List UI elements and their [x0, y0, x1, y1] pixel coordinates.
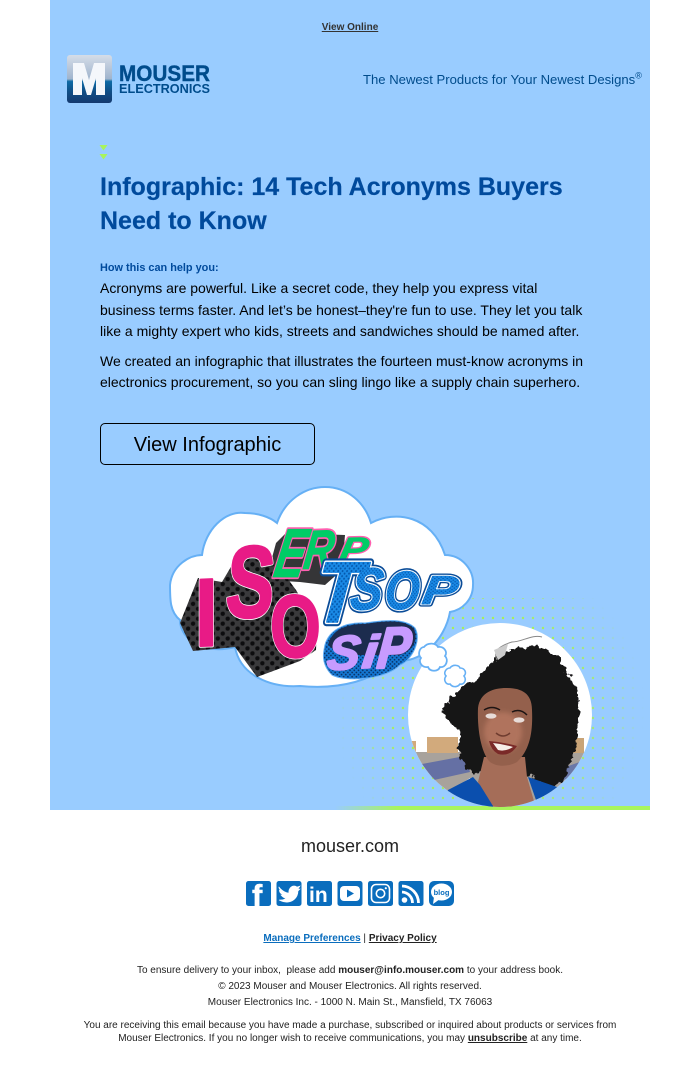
- word: ERP: P: [337, 531, 372, 569]
- small thought puff 1: [419, 644, 447, 671]
- body text: [100, 280, 582, 339]
- link: mouser.com: mouser.com: [301, 836, 399, 856]
- icon: linkedin: in: [309, 884, 328, 907]
- footer legal text: Mouser Electronics. If you no longer wish to receive communications, you may unsubscribe at any time.: [118, 1032, 582, 1044]
- ISO shadow: [180, 552, 317, 677]
- shirt: [448, 777, 493, 807]
- word: TSOP: P: [420, 568, 462, 613]
- word: ERP: R: [300, 519, 338, 581]
- word: TSOP: O: [383, 561, 422, 621]
- halftone dots: [340, 598, 650, 806]
- icon: blog: [429, 881, 454, 906]
- logo: Mouser Electronics: [67, 55, 210, 103]
- icon: green double chevrons: [100, 145, 108, 160]
- word: TSOP: S: [348, 556, 387, 623]
- footer address text: © 2023 Mouser and Mouser Electronics. All rights reserved.: [218, 981, 482, 992]
- photo circle: woman looking up: [408, 623, 592, 807]
- word: ISO: S: [222, 525, 279, 639]
- hair: [443, 646, 580, 788]
- button: view infographic: [100, 423, 315, 465]
- body text 2: We created an infographic that illustrates the fourteen must-know acronyms in: [100, 352, 583, 368]
- body text: business terms faster. And let’s be honest–they're fun to use. They let you talk: [100, 302, 582, 318]
- word: ISO: I: [195, 558, 218, 666]
- eyes: [486, 713, 496, 719]
- word: TSOP: T: [311, 545, 373, 641]
- panel: hero background: [50, 0, 650, 810]
- word: TSOP: S: [348, 556, 387, 623]
- smile: [489, 741, 517, 755]
- word: ERP: E: [269, 514, 315, 592]
- word: SiP: S: [325, 626, 363, 681]
- word: ISO: I: [195, 558, 218, 666]
- word: TSOP: P: [420, 568, 462, 613]
- title: [100, 173, 563, 235]
- footer legal text: [84, 1020, 616, 1044]
- warehouse background: [408, 752, 592, 808]
- word: TSOP: [311, 545, 462, 641]
- word: TSOP: O: [383, 561, 422, 621]
- subheading: How this can help you:: [100, 262, 219, 274]
- icon: youtube: [338, 881, 362, 906]
- body text: Acronyms are powerful. Like a secret code, they help you express vital: [100, 280, 537, 296]
- icon: facebook: [246, 878, 271, 913]
- icon: blog: blog: [434, 888, 450, 897]
- logo: Mouser Electronics: ELECTRONICS: [119, 81, 210, 96]
- icon: instagram: [368, 881, 393, 906]
- word: ERP: E: [269, 514, 315, 592]
- icon: twitter: [276, 881, 302, 906]
- face: [478, 688, 532, 766]
- thought bubble: cloud: [170, 487, 473, 687]
- small thought puff 2: [445, 665, 465, 687]
- icon: linkedin: [307, 881, 332, 907]
- link: view online: View Online: [322, 22, 378, 32]
- word: TSOP: S: [348, 556, 387, 623]
- body text 2: [100, 352, 583, 390]
- footer links: Manage Preferences | Privacy Policy: [263, 933, 437, 944]
- footer address text: [137, 965, 563, 1008]
- word: SiP: i: [360, 626, 382, 678]
- word: ERP: R: [300, 519, 338, 581]
- body text: like a mighty expert who kids, streets and sandwiches should be named after.: [100, 323, 579, 339]
- word: ERP: P: [337, 531, 372, 569]
- tagline: The Newest Products for Your Newest Designs®: [363, 71, 642, 87]
- word: ISO: O: [270, 578, 321, 677]
- title: Need to Know: [100, 207, 267, 235]
- neck: [478, 757, 536, 808]
- word: SiP: P: [375, 616, 415, 681]
- title: Infographic: 14 Tech Acronyms Buyers: [100, 173, 563, 201]
- word: TSOP: O: [383, 561, 422, 621]
- word: ISO: S: [222, 525, 279, 639]
- footer address text: Mouser Electronics Inc. - 1000 N. Main St., Mansfield, TX 76063: [208, 997, 492, 1008]
- footer address text: To ensure delivery to your inbox, please add mouser@info.mouser.com to your address book.: [137, 965, 563, 976]
- logo: Mouser Electronics: MOUSER: [119, 61, 210, 86]
- social icons: [246, 880, 454, 908]
- body text 2: electronics procurement, so you can sling lingo like a supply chain superhero.: [100, 374, 580, 390]
- button: view infographic: View Infographic: [134, 434, 281, 456]
- word: TSOP: T: [311, 545, 373, 641]
- ERP shadow: [266, 533, 345, 585]
- word: TSOP: P: [420, 568, 462, 613]
- footer legal text: You are receiving this email because you have made a purchase, subscribed or inquired about products or services from: [84, 1020, 616, 1031]
- word: SiP: [323, 616, 417, 681]
- green base line: [335, 806, 650, 810]
- word: ERP: [269, 514, 372, 592]
- word: ISO: O: [270, 578, 321, 677]
- nose shadow: [496, 733, 510, 736]
- illustration: thought cloud and woman: [169, 486, 650, 810]
- word: ISO: [195, 525, 321, 677]
- icon: rss: [398, 881, 424, 906]
- word: TSOP: T: [311, 545, 373, 641]
